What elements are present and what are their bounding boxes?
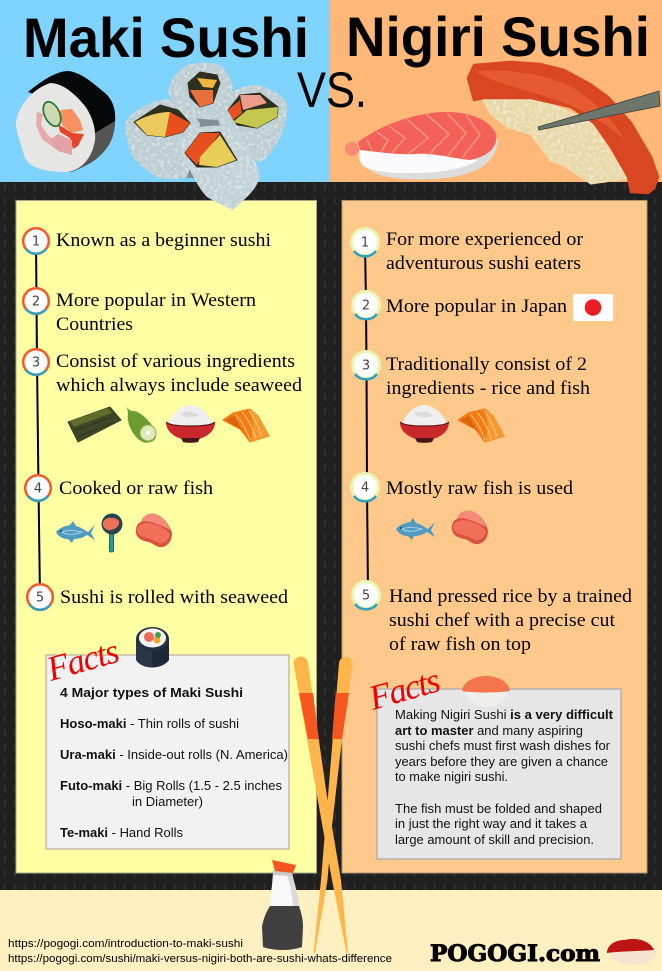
step 3 text [386, 354, 591, 399]
facts text: maki: in Diameter) [132, 795, 203, 809]
step 5 marker: 5 [362, 588, 370, 604]
step 3 text: Consist of various ingredients [56, 351, 295, 372]
step 4 marker: 4 [361, 480, 369, 496]
illustration: nigiri with salmon [345, 112, 498, 179]
step 2 text: Countries [56, 314, 133, 335]
panel: maki sushi [16, 200, 316, 873]
step 1 text [386, 229, 584, 274]
icon: tuna [56, 521, 95, 543]
step 1 text: For more experienced or [386, 229, 584, 250]
facts text: nigiri: The fish must be folded and shaped [395, 802, 602, 816]
step 5 text: of raw fish on top [389, 634, 531, 655]
icon: tuna slice [452, 511, 488, 544]
illustration: maki roll [16, 71, 115, 172]
panel: nigiri sushi [342, 200, 647, 873]
facts text: nigiri: art to master and many aspiring [395, 724, 583, 738]
maki piece: left [125, 99, 200, 179]
facts text: maki: Ura-maki - Inside-out rolls (N. America) [60, 748, 288, 762]
icon: nigiri small [462, 676, 510, 707]
icon: tuna [396, 518, 435, 540]
icon: japanese flag [573, 294, 613, 321]
step 5 text: Sushi is rolled with seaweed [60, 587, 289, 608]
step 4 marker [25, 475, 51, 501]
step 5 marker [352, 582, 380, 609]
step 4 marker: 4 [34, 482, 42, 496]
footer background [0, 890, 662, 971]
facts heading: maki: Facts [41, 631, 123, 689]
facts text: nigiri: sushi chefs must first wash dishes for [395, 739, 610, 753]
title: nigiri sushi: Nigiri Sushi [346, 5, 650, 68]
chopsticks [294, 657, 353, 953]
facts text: nigiri: large amount of skill and precision. [395, 833, 594, 847]
step 2 text: More popular in Japan [386, 296, 568, 317]
step 1 text: Known as a beginner sushi [56, 230, 271, 251]
icon: soy sauce bottle [262, 860, 303, 950]
maki piece: right [217, 85, 287, 163]
step 2 text [56, 290, 257, 335]
facts box: maki [46, 655, 289, 849]
header background: maki side [0, 0, 330, 183]
step 2 marker: 2 [362, 298, 370, 314]
icon: rice bowl [166, 405, 215, 443]
facts text: nigiri [395, 708, 614, 847]
bamboo mat background [0, 182, 662, 890]
step 5 marker: 5 [36, 590, 44, 606]
step 3 text: ingredients - rice and fish [386, 378, 591, 399]
step 2 marker [352, 292, 380, 319]
step 3 marker [23, 349, 49, 375]
step 1 marker: 1 [32, 234, 40, 250]
title: maki sushi: Maki Sushi [23, 6, 309, 69]
chopstick [538, 91, 660, 130]
maki piece: top [168, 63, 233, 120]
facts text: maki: Futo-maki - Big Rolls (1.5 - 2.5 inches [60, 779, 282, 793]
source links [8, 938, 392, 965]
facts text: nigiri: in just the right way and it takes a [395, 817, 587, 831]
step 3 text: which always include seaweed [56, 375, 303, 396]
step 1 marker: 1 [361, 236, 369, 250]
facts text: maki: Te-maki - Hand Rolls [60, 826, 183, 840]
facts text: nigiri: to make nigiri sushi. [395, 770, 508, 784]
illustration: nigiri photo with chopstick [468, 62, 660, 193]
step 1 marker [23, 228, 49, 254]
step 5 text: sushi chef with a precise cut [389, 610, 616, 631]
icon: salmon fillet [223, 409, 269, 442]
step 1 marker [352, 228, 378, 256]
step 3 marker [352, 352, 380, 379]
step 3 text [56, 351, 303, 396]
facts text: nigiri: years before they are given a chance [395, 755, 608, 769]
header background: nigiri side [330, 0, 662, 183]
step 5 text: Hand pressed rice by a trained [389, 586, 633, 607]
step 2 text: More popular in Western [56, 290, 257, 311]
maki piece: front [178, 126, 260, 210]
step 3 marker: 3 [362, 358, 370, 374]
icon: frying pan [102, 514, 122, 552]
nigiri rice [484, 96, 626, 183]
icon: cucumber [127, 407, 156, 443]
step 5 text [389, 586, 633, 655]
step 4 marker [352, 474, 378, 501]
icon: seaweed [68, 407, 121, 442]
step 3 text: Traditionally consist of 2 [386, 354, 587, 375]
icon: salmon fillet [458, 409, 504, 442]
step 1 text: adventurous sushi eaters [386, 253, 581, 274]
facts text: nigiri: Making Nigiri Sushi is a very difficult [395, 708, 614, 722]
logo: nigiri icon [607, 939, 657, 965]
nigiri timeline line [365, 242, 368, 595]
step 4 text: Cooked or raw fish [59, 478, 214, 499]
step 3 marker: 3 [32, 356, 40, 370]
icon: tuna slice [136, 514, 172, 547]
facts text: maki: Hoso-maki - Thin rolls of sushi [60, 717, 239, 731]
facts text: maki: 4 Major types of Maki Sushi [60, 686, 243, 700]
source links: https://pogogi.com/introduction-to-maki-sushi [8, 938, 243, 950]
nigiri tuna [468, 62, 658, 193]
step 2 marker: 2 [32, 294, 40, 310]
step 2 marker [23, 288, 49, 314]
versus label: VS. [297, 62, 367, 118]
step 4 text: Mostly raw fish is used [386, 478, 574, 499]
facts text: maki [60, 686, 288, 840]
facts box: nigiri [377, 689, 621, 859]
source links: https://pogogi.com/sushi/maki-versus-nigiri-both-are-sushi-whats-difference [8, 953, 392, 965]
maki timeline line [36, 241, 40, 597]
logo: pogogi.com: POGOGI.com [430, 941, 600, 967]
step 5 marker [27, 584, 53, 610]
icon: rice bowl [400, 405, 449, 443]
facts heading: nigiri: Facts [363, 660, 444, 718]
icon: maki roll small [136, 627, 169, 668]
illustration: maki photo [125, 63, 287, 210]
